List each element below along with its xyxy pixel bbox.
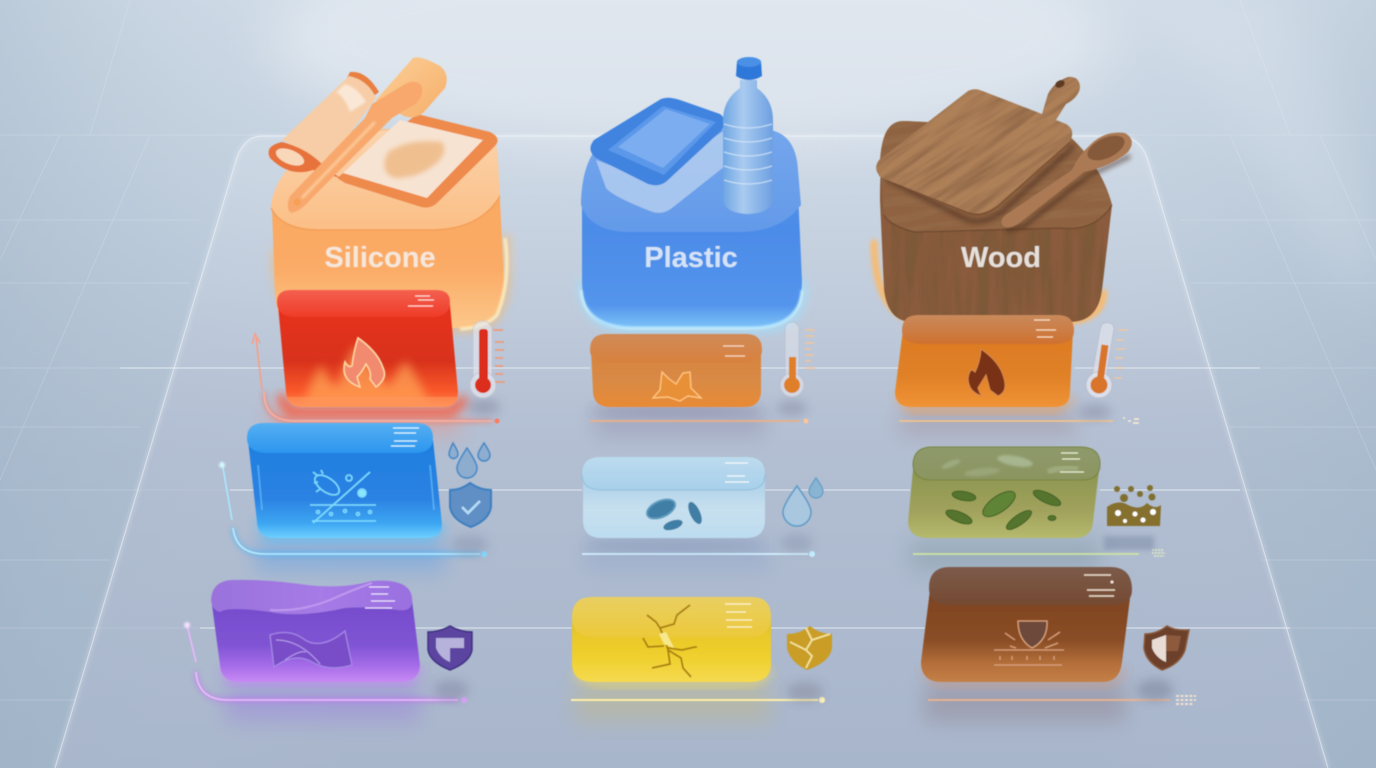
icon: bacteria colony (944, 487, 1063, 533)
callout line: plastic hygiene (582, 551, 815, 557)
plastic container (590, 98, 725, 213)
callout line: silicone heat (252, 334, 500, 424)
column: Plastic (581, 57, 803, 328)
block: wood durability (921, 567, 1132, 684)
icon: bacteria (644, 496, 705, 532)
icon: shield with check (450, 483, 491, 555)
callout line: wood hygiene (913, 550, 1165, 556)
block: silicone heat (277, 290, 466, 412)
block: wood hygiene (908, 447, 1100, 538)
block: plastic heat (590, 334, 762, 415)
column: Wood (868, 76, 1133, 328)
callout line: plastic heat (590, 418, 808, 424)
block: plastic hygiene (582, 457, 765, 551)
icon: water drops plastic (781, 478, 823, 552)
silicone mat (337, 114, 498, 208)
icon: water drops (449, 443, 490, 478)
icon: half shield (428, 626, 472, 700)
icon: cracked shield (787, 626, 832, 702)
icon: twisted material (270, 631, 352, 668)
label: Wood: Wood (961, 242, 1041, 274)
rolled silicone sheet (268, 72, 379, 178)
silicone spatula (288, 57, 447, 213)
callout line: wood heat (899, 418, 1139, 423)
pedestal: plastic (581, 130, 803, 328)
label: Plastic: Plastic (644, 242, 738, 274)
thermometer: wood (1079, 323, 1128, 420)
pedestal: wood (868, 120, 1113, 328)
block: silicone hygiene (247, 423, 444, 538)
glass base panel (55, 136, 1328, 768)
icon: flame (344, 338, 384, 387)
plastic bottle (723, 57, 773, 214)
row 2: hygiene (219, 423, 1165, 557)
row 1: heat resistance (252, 290, 1139, 424)
callout line: plastic durability (571, 697, 825, 703)
pedestal: silicone (271, 128, 507, 329)
block: plastic durability (572, 597, 771, 684)
thermometer: silicone (468, 321, 505, 415)
label: Silicone: Silicone (324, 242, 436, 274)
row guide lines (120, 368, 1290, 628)
callout line: wood durability (928, 696, 1196, 704)
icon: dark flame (968, 349, 1005, 396)
column: Silicone (268, 57, 507, 329)
wooden cutting board (876, 76, 1081, 226)
callout line: silicone hygiene (219, 462, 487, 557)
icon: crack (643, 605, 697, 677)
icon: bacteria barrier (310, 470, 376, 523)
block: wood heat (895, 315, 1074, 410)
icon: melted form (653, 372, 701, 401)
icon: shield over surface (994, 621, 1064, 665)
callout line: silicone durability (184, 622, 467, 703)
block: silicone durability (211, 580, 421, 682)
row 3: durability (184, 567, 1196, 704)
icon: half shield wood (1137, 626, 1189, 701)
colored floor reflections (225, 404, 1125, 722)
wooden spoon (1002, 130, 1132, 230)
thermometer: plastic (777, 322, 815, 416)
icon: porous wood with particles (1104, 485, 1161, 550)
